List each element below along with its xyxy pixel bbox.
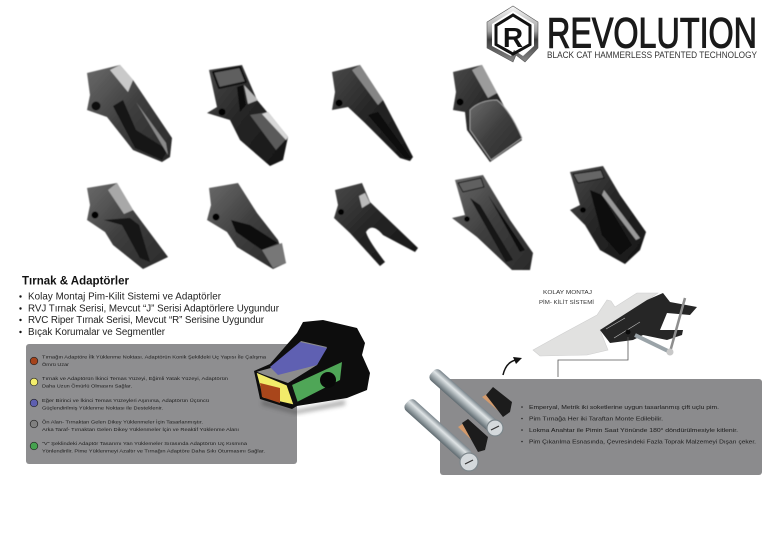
product: tooth 9 xyxy=(570,166,646,264)
legend item: grey: Ön Alan- Tırnaktan Gelen Dikey Yüklenmeler İçin Tasarlanmıştır. xyxy=(42,418,203,424)
panel: load points legend xyxy=(26,344,297,464)
pin feature list: Lokma Anahtar ile Pimin Saat Yönünde 180° döndürülmesiyle kitlenir. xyxy=(529,428,738,434)
diagram: colour coded adapter nose xyxy=(254,320,370,414)
product: tooth 1 xyxy=(87,65,172,162)
legend item: green xyxy=(30,441,265,454)
legend item: yellow xyxy=(30,375,228,388)
feature bullet list: RVC Riper Tırnak Serisi, Mevcut “R” Serisine Uygundur xyxy=(28,315,265,326)
legend item: blue: Güçlendirilmiş Yüklenme Noktası ile Desteklenir. xyxy=(42,406,163,410)
product: tooth 6 xyxy=(207,183,286,269)
image: tooth assembly with translucent tooth and pin xyxy=(533,293,697,356)
legend item: yellow: Tırnak ve Adaptörün İkinci Temas Yüzeyi, Eğimli Yatak Yüzeyi, Adaptörün xyxy=(42,375,228,381)
heading: Tırnak & Adaptörler: Tırnak & Adaptörler xyxy=(22,276,130,288)
legend item: red: Tırnağın Adaptöre İlk Yüklenme Noktası. Adaptörün Konik Şekildeki Uç Yapısı İle Çalışma xyxy=(42,354,266,360)
legend item: green: “V” Şeklindeki Adaptör Tasarımı Yan Yüklemeler Sırasında Adaptörün Uç Kısmına xyxy=(42,441,247,446)
legend item: blue: Eğer Birinci ve İkinci Temas Yüzeyleri Aşınırsa, Adaptörün Üçüncü xyxy=(42,397,209,403)
pin feature list: Pim Çıkarılma Esnasında, Çevresindeki Fazla Toprak Malzemeyi Dışarı çeker. xyxy=(529,440,756,446)
feature bullet list: Bıçak Korumalar ve Segmentler xyxy=(28,327,166,338)
feature bullet list: Kolay Montaj Pim-Kilit Sistemi ve Adaptörler xyxy=(28,292,222,302)
product: tooth 7 forked xyxy=(334,183,418,266)
legend item: red: Ömrü Uzar xyxy=(42,361,70,367)
product: tooth 2 xyxy=(207,65,288,166)
icon: hexagon R emblem: R xyxy=(503,22,523,53)
legend item: red xyxy=(30,354,266,367)
image: lower lock pin xyxy=(402,397,488,471)
callout label: Kolay Montaj Pim-Kilit Sistemi: KOLAY MONTAJ xyxy=(543,290,592,296)
product: tooth 8 xyxy=(452,175,533,270)
product: tooth 5 xyxy=(87,183,168,269)
icon: hexagon R emblem xyxy=(487,6,538,62)
callout label: Kolay Montaj Pim-Kilit Sistemi: PİM- KİLİT SİSTEMİ xyxy=(539,299,594,306)
pin feature list: Pim Tırnağa Her iki Taraftan Monte Edilebilir. xyxy=(529,416,663,422)
legend item: grey xyxy=(30,418,239,432)
pin feature list: Emperyal, Metrik iki soketlerine uygun tasarlanmış çift uçlu pim. xyxy=(529,405,719,411)
feature bullet list: RVJ Tırnak Serisi, Mevcut “J” Serisi Adaptörlere Uygundur xyxy=(28,304,280,314)
feature bullet list xyxy=(19,292,280,338)
pin feature list xyxy=(521,405,756,446)
image: upper lock pin xyxy=(427,367,512,436)
callout leader line xyxy=(558,337,628,377)
legend item: green: Yönlendirilir. Pime Yüklenmeyi Azaltır ve Tırnağın Adaptöre Daha Sıkı Oturmasını Sağlar. xyxy=(42,448,265,454)
panel: pin features xyxy=(440,379,762,475)
arrow: pin to assembly xyxy=(503,357,522,375)
legend item: yellow: Daha Uzun Ömürlü Olmasını Sağlar. xyxy=(42,382,132,388)
legend item: blue xyxy=(30,397,209,410)
legend item: grey: Arka Taraf- Tırnaktan Gelen Dikey Yüklenmeler İçin ve Reaktif Yüklenme Alanı xyxy=(42,426,239,432)
product: tooth 4 xyxy=(453,65,522,162)
callout label: Kolay Montaj Pim-Kilit Sistemi xyxy=(539,290,594,306)
logo: Revolution xyxy=(487,6,757,62)
product: tooth 3 xyxy=(332,65,413,161)
